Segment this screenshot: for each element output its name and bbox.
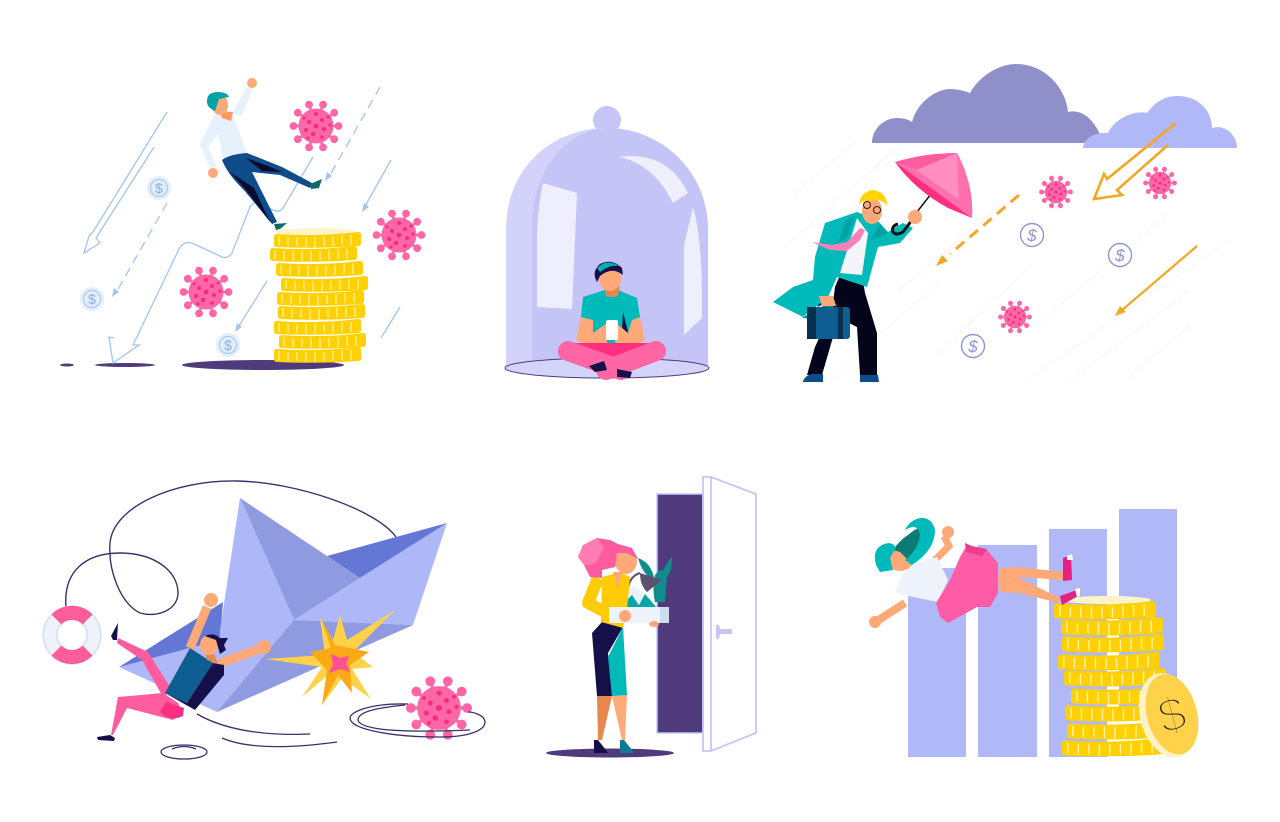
- paper boat: [119, 498, 447, 712]
- dollar coins: $: [88, 291, 96, 307]
- folders in box: [608, 586, 656, 607]
- orange double arrow: [1094, 123, 1176, 199]
- falling woman: [869, 518, 1080, 628]
- bar chart: [908, 509, 1177, 757]
- dashed arrows: [112, 87, 400, 338]
- door handle: [716, 625, 732, 639]
- large gold coin: [1130, 666, 1207, 764]
- panel: man with umbrella in storm: [773, 64, 1237, 382]
- open door leaf: [703, 477, 756, 751]
- rain streaks: [787, 142, 1230, 380]
- ground shadows: [60, 360, 344, 370]
- seated man: [568, 262, 656, 378]
- dark cloud: [872, 64, 1103, 143]
- panel: woman falling over bar chart: [869, 509, 1207, 764]
- motion lines: [161, 704, 485, 759]
- viruses: [999, 168, 1176, 332]
- light cloud: [1083, 96, 1237, 148]
- zig-zag falling arrow: [109, 157, 313, 363]
- coin stack: [270, 228, 368, 363]
- dollar coins: $: [224, 337, 232, 353]
- virus: [408, 678, 470, 738]
- falling man: [200, 78, 322, 230]
- life ring: [50, 613, 94, 657]
- businessman: [773, 190, 913, 382]
- falling man: [97, 593, 271, 741]
- woman: [578, 538, 638, 753]
- coin stack: [1054, 596, 1173, 756]
- dollar coins: $: [967, 337, 978, 356]
- panel: man falling from coin stack: [60, 78, 424, 370]
- viruses: [181, 102, 424, 316]
- double outline arrow: [84, 112, 167, 253]
- umbrella: [893, 153, 972, 234]
- dark doorway: [657, 494, 703, 733]
- explosion: [265, 610, 395, 705]
- floor shadow: [546, 748, 674, 758]
- panel: man under glass dome: [505, 106, 709, 378]
- large gold coin: $: [1153, 687, 1192, 745]
- dollar coins: $: [155, 180, 163, 196]
- dollar coins: $: [1026, 226, 1037, 245]
- dollar coins: $: [1114, 246, 1125, 265]
- panel: woman leaving through door: [546, 477, 756, 758]
- glass dome: [505, 106, 709, 378]
- cardboard box: [609, 607, 669, 627]
- orange solid arrow: [1115, 246, 1197, 316]
- panel: sinking paper boat: [50, 481, 485, 759]
- life ring rope: [66, 481, 396, 614]
- dollar coins: [80, 176, 240, 357]
- orange dashed arrow: [936, 195, 1019, 266]
- plant and lamp: [628, 557, 672, 602]
- dollar coins: [962, 224, 1132, 358]
